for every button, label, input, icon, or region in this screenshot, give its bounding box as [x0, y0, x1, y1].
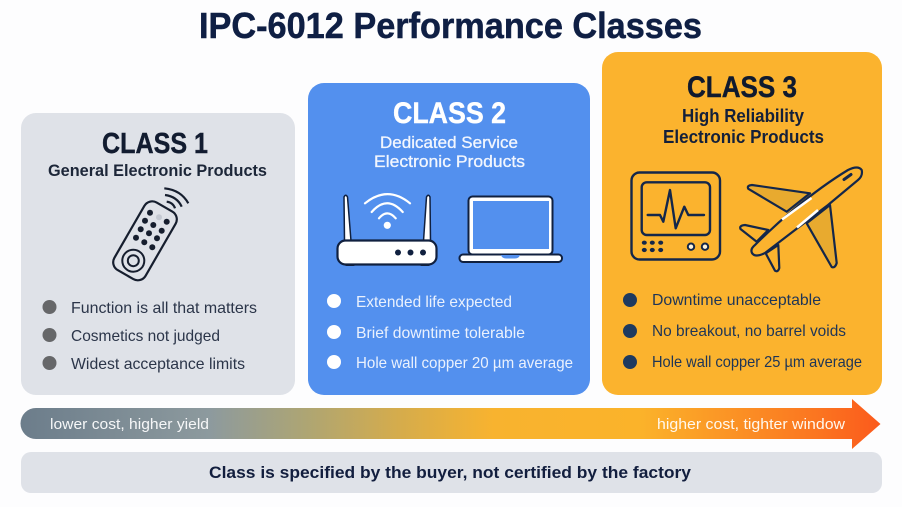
bullet list: class 2 — [327, 294, 573, 372]
panel: class 1 — [21, 113, 295, 395]
arrow label: high end: higher cost, tighter window — [657, 416, 845, 433]
heading: class 3: CLASS 3 — [687, 71, 797, 104]
bullet list: class 1 — [42, 300, 257, 373]
panel: class 2 — [308, 83, 590, 395]
heading: class 2: CLASS 2 — [393, 97, 506, 130]
icon: airplane — [740, 168, 862, 271]
bullet list: class 1: Widest acceptance limits — [71, 356, 245, 373]
bullet list: class 3: No breakout, no barrel voids — [652, 323, 846, 340]
icon: wifi router — [338, 194, 436, 266]
bullet list: class 2: Brief downtime tolerable — [356, 325, 525, 342]
bullet list: class 1: Cosmetics not judged — [71, 328, 220, 345]
bullet list: class 1: Function is all that matters — [71, 300, 257, 317]
icon: patient monitor — [632, 172, 720, 260]
subtitle: class 2 — [374, 133, 525, 171]
bullet list: class 2: Hole wall copper 20 µm average — [356, 355, 573, 372]
bullet list: class 3: Hole wall copper 25 µm average — [652, 354, 862, 371]
subtitle: class 1: General Electronic Products — [48, 161, 267, 180]
bullet list: class 2: Extended life expected — [356, 294, 512, 311]
callout: footer note — [21, 452, 882, 493]
arrow: cost scale — [20, 399, 880, 449]
subtitle: class 3: High Reliability — [682, 106, 804, 126]
title: IPC-6012 Performance Classes — [199, 5, 702, 46]
callout: footer note: Class is specified by the buyer, not certified by the factory — [209, 463, 692, 482]
subtitle: class 3 — [663, 106, 824, 147]
arrow label: low end: lower cost, higher yield — [50, 416, 209, 433]
heading: class 1: CLASS 1 — [102, 128, 208, 160]
bullet list: class 3 — [623, 292, 862, 371]
bullet list: class 3: Downtime unacceptable — [652, 292, 821, 309]
subtitle: class 2: Electronic Products — [374, 152, 525, 171]
icon: remote control — [110, 188, 188, 284]
subtitle: class 2: Dedicated Service — [380, 133, 518, 152]
panel: class 3 — [602, 52, 882, 395]
icon: laptop — [460, 196, 562, 262]
subtitle: class 3: Electronic Products — [663, 127, 824, 147]
